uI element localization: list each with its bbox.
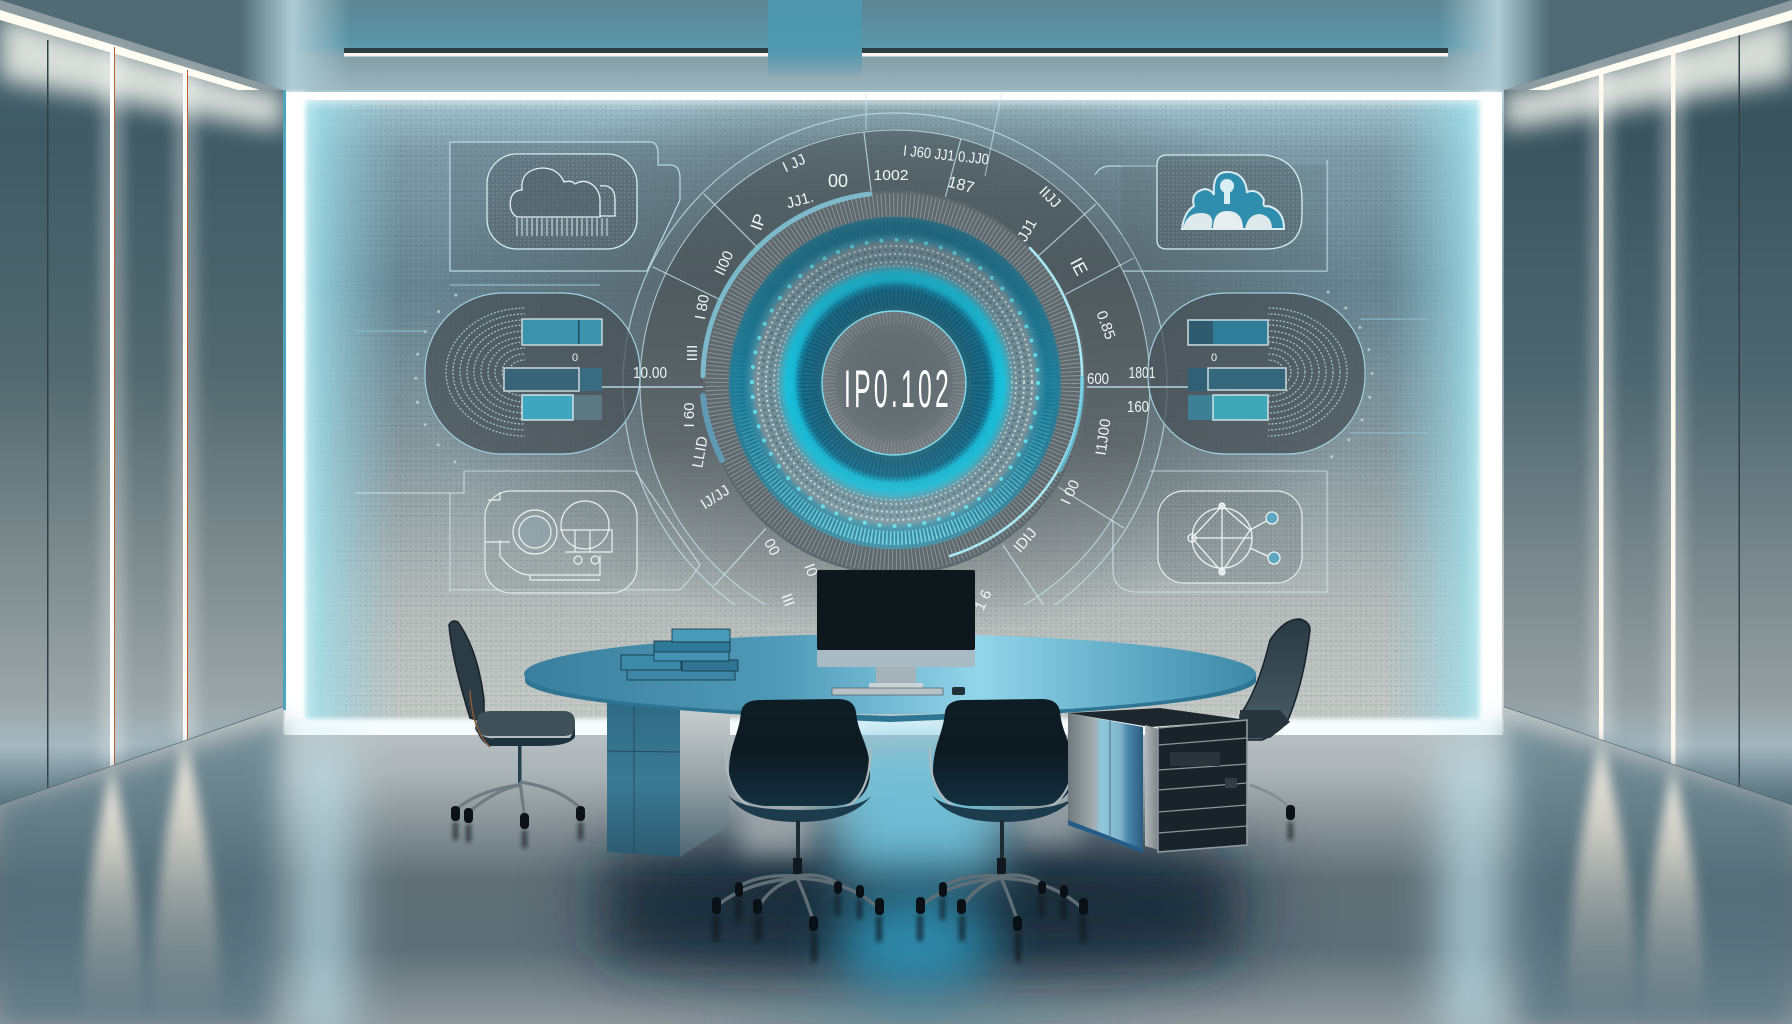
label: 10.00: 10.00 <box>633 365 667 382</box>
icon: globe network <box>1188 503 1280 575</box>
dial scale labels: IIJJ <box>1035 183 1064 212</box>
HUD panel: lower right network <box>1113 471 1327 592</box>
right wall light strip 1 <box>1599 70 1604 740</box>
dial scale labels: I0 <box>800 561 821 579</box>
chair: right center <box>916 699 1088 931</box>
glass arc <box>703 194 1082 556</box>
ceiling <box>0 0 1792 94</box>
left wall light strip 1 <box>110 47 115 768</box>
bar 3 <box>522 395 602 420</box>
label: 1801: 1801 <box>1128 365 1156 382</box>
dial scale labels: 00 <box>828 171 848 191</box>
ceiling light: right <box>862 48 1448 56</box>
HUD panel: lower left <box>355 471 700 593</box>
dial scale labels: IJ/JJ <box>698 482 733 513</box>
dial scale labels: 0.85 <box>1093 309 1119 342</box>
dial scale labels: III <box>777 591 798 609</box>
side chair: right <box>1240 619 1310 820</box>
top dim and bottom lift <box>729 217 1061 549</box>
label: 600: 600 <box>1087 371 1109 388</box>
dial scale labels: 187 <box>946 174 976 197</box>
book stack <box>621 629 738 680</box>
label: 0: 0 <box>1211 352 1217 364</box>
left wall light strip 2 <box>183 70 188 742</box>
dial scale labels: IP <box>747 211 770 233</box>
dial scale labels: I J60 JJ1 0.JJ0 <box>902 143 990 168</box>
dial scale labels: I 00 <box>1057 477 1083 507</box>
outer dots <box>1328 292 1372 458</box>
fingerprint arcs <box>1268 307 1348 437</box>
fingerprint arcs <box>445 307 525 437</box>
bar 1 <box>1188 320 1268 345</box>
dial scale labels: I JJ <box>780 151 808 176</box>
bright beads <box>752 240 1038 526</box>
table pedestal <box>607 703 730 857</box>
dial scale labels: IDIJ <box>1010 525 1040 556</box>
floor reflections of wheels <box>453 822 1293 962</box>
dial scale labels: 00 <box>760 536 783 559</box>
server tower right <box>1068 708 1247 852</box>
outer tick ring <box>718 206 1072 560</box>
left side wall <box>0 0 283 805</box>
desktop monitor <box>817 570 975 688</box>
dial scale labels: 1002 <box>874 167 908 184</box>
HUD panel: upper right cloud <box>1095 155 1327 271</box>
central radial dial <box>703 191 1087 575</box>
dark teal ticks <box>810 298 980 468</box>
dial scale labels: LLID <box>689 435 712 469</box>
back wall with glow frame <box>282 88 1504 738</box>
icon: lens and hand <box>485 492 612 580</box>
grey-white speckle bands <box>758 246 1032 520</box>
dial scale labels: JJ1. <box>785 189 816 212</box>
keyboard and mouse <box>832 687 965 695</box>
inner disc <box>822 311 966 455</box>
connector lines <box>602 386 1188 388</box>
dial scale labels: I 60 <box>681 402 698 428</box>
sector dividers <box>652 132 1133 609</box>
HUD panel: middle right bars <box>1087 292 1428 458</box>
dial scale labels: IIII <box>684 345 701 361</box>
cyan glow band <box>791 277 999 485</box>
bar 3 <box>1188 395 1268 420</box>
side chair: left <box>449 621 585 829</box>
ceiling light: left <box>344 48 768 56</box>
label: 160: 160 <box>1127 399 1149 416</box>
icon: blue cloud people <box>1182 172 1284 229</box>
colored ring body <box>729 217 1061 549</box>
HUD panel: middle left bars <box>355 292 667 462</box>
bar 1 <box>522 319 602 345</box>
bar 2 <box>1188 368 1286 391</box>
icon: wireframe cloud <box>510 168 615 236</box>
teal tick band <box>740 228 1050 538</box>
dial scale labels: IE <box>1066 254 1092 279</box>
outer dots <box>416 292 460 462</box>
dial scale labels: I 80 <box>692 293 713 321</box>
bar 2 <box>504 368 602 391</box>
dial scale labels <box>681 143 1119 613</box>
table top <box>524 634 1256 722</box>
right wall light strip 2 <box>1671 47 1676 765</box>
drive bays <box>1158 738 1247 833</box>
HUD panel: upper left cloud <box>450 142 680 285</box>
central radial dial: IP0.102 <box>844 360 952 419</box>
dial scale labels: 1 6 <box>971 587 996 613</box>
outer arc lines <box>623 113 1167 657</box>
floor <box>0 707 1792 1024</box>
dial scale labels: II00 <box>711 248 737 278</box>
dial scale labels: JJ1 <box>1014 216 1041 245</box>
HUD: central radial sector band <box>623 92 1167 657</box>
server tower left <box>1068 713 1143 853</box>
label: 0: 0 <box>572 352 578 364</box>
right side wall <box>1504 0 1792 805</box>
dial scale labels: I1J00 <box>1093 418 1114 456</box>
center chairs <box>712 699 1088 931</box>
